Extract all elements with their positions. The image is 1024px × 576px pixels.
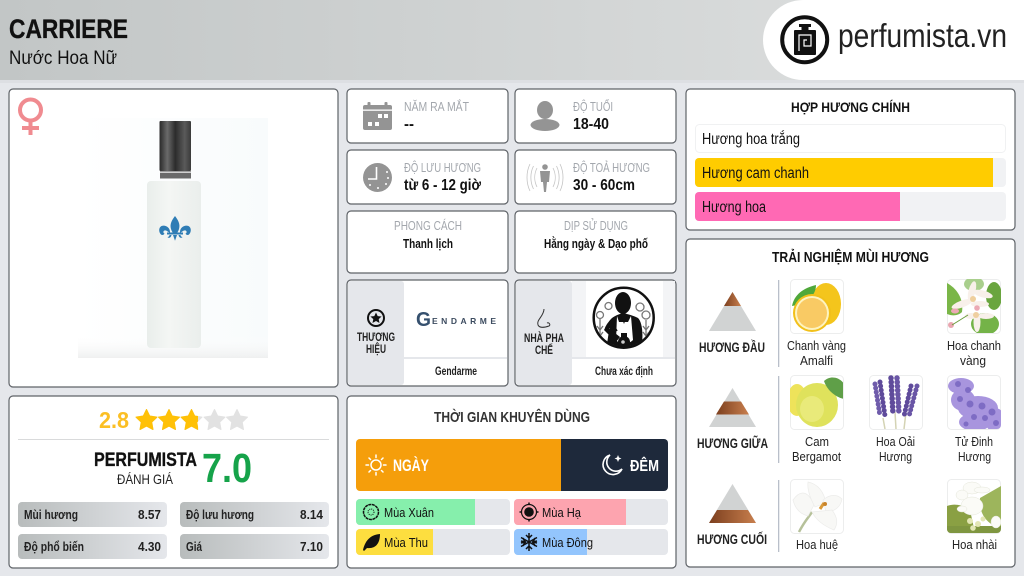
- card: occasion: DỊP SỬ DỤNG: [564, 218, 628, 233]
- note: lavender: [870, 376, 922, 430]
- card: release year: NĂM RA MẮT: [404, 99, 469, 114]
- card: occasion: Hằng ngày & Dạo phố: [544, 236, 648, 251]
- note label: amalfi lemon: Chanh vàng: [787, 338, 846, 353]
- card: release year: --: [404, 116, 414, 133]
- note label: bergamot: Cam: [805, 434, 829, 449]
- note label: bergamot: Bergamot: [792, 449, 841, 464]
- perfumista label: PERFUMISTA: [94, 450, 197, 471]
- note: amalfi lemon: [790, 280, 844, 334]
- community score: 2.8: [99, 407, 129, 433]
- card: brand: HIỆU: [366, 341, 386, 356]
- card: projection: ĐỘ TOẢ HƯƠNG: [573, 160, 650, 175]
- score: price: 7.10: [300, 539, 323, 554]
- brand logo: [416, 309, 496, 331]
- score: price: Giá: [186, 539, 203, 554]
- icon: sun: [366, 455, 386, 475]
- accord: floral: [695, 192, 1006, 221]
- pyramid: base notes: [709, 484, 756, 523]
- card: projection: 30 - 60cm: [573, 177, 635, 194]
- card: style: [347, 211, 508, 273]
- panel: scent experience: [686, 239, 1015, 567]
- perfume name: CARRIERE: [9, 14, 128, 44]
- accord: white floral: Hương hoa trắng: [702, 131, 800, 148]
- note label: lavender: Hoa Oải: [876, 434, 915, 449]
- icon: nose: [538, 309, 550, 327]
- score: popularity: Độ phổ biến: [24, 539, 84, 554]
- score: scent: Mùi hương: [24, 507, 78, 522]
- day night bar: ĐÊM: [630, 456, 659, 475]
- panel: main accords: HỢP HƯƠNG CHÍNH: [791, 99, 910, 115]
- panel: recommended time: [347, 396, 676, 568]
- season: autumn: [356, 529, 510, 555]
- icon: person: [530, 101, 560, 131]
- card: age: [515, 89, 676, 143]
- note label: lilac: Hương: [958, 449, 991, 464]
- star rating: [136, 410, 248, 430]
- note label: lavender: Hương: [879, 449, 912, 464]
- card: release year: [347, 89, 508, 143]
- note label: lily: Hoa huệ: [796, 537, 838, 552]
- pyramid: top notes: [709, 292, 756, 331]
- season: winter: [514, 529, 668, 555]
- icon: calendar: [363, 102, 392, 130]
- note label: lilac: Tử Đinh: [955, 434, 993, 449]
- panel: perfume image: [9, 89, 338, 387]
- card: perfumer: [515, 280, 676, 386]
- note label: lavender: [876, 434, 915, 464]
- card: brand: THƯƠNG: [357, 330, 395, 344]
- score: longevity: 8.14: [300, 507, 324, 522]
- card: brand: Gendarme: [435, 366, 477, 378]
- accord: floral: Hương hoa: [702, 199, 766, 216]
- score: popularity: [18, 534, 167, 559]
- accord: citrus: Hương cam chanh: [702, 165, 809, 182]
- review label: ĐÁNH GIÁ: [117, 471, 174, 487]
- season: spring: Mùa Xuân: [384, 505, 434, 520]
- card: longevity: từ 6 - 12 giờ: [404, 177, 482, 194]
- card: brand: [347, 280, 508, 386]
- score: longevity: [180, 502, 329, 527]
- panel: main accords: [686, 89, 1015, 230]
- note label: amalfi lemon: Amalfi: [800, 353, 833, 368]
- card: longevity: [347, 150, 508, 204]
- card: perfumer: NHÀ PHA: [524, 330, 564, 345]
- header band: [0, 0, 1024, 83]
- note label: bergamot: [792, 434, 841, 464]
- note: bergamot: [787, 376, 844, 430]
- card: style: Thanh lịch: [403, 237, 453, 251]
- note label: lemon blossom: vàng: [960, 353, 986, 368]
- season: summer: [514, 499, 668, 525]
- note: lilac: [948, 376, 1005, 432]
- card: perfumer: Chưa xác định: [595, 366, 653, 378]
- icon: female symbol: [20, 100, 41, 135]
- icon: star badge: [368, 310, 384, 326]
- panel: recommended time: THỜI GIAN KHUYÊN DÙNG: [434, 408, 590, 426]
- note: lemon blossom: [947, 277, 1002, 335]
- panel: scent experience: TRẢI NGHIỆM MÙI HƯƠNG: [772, 248, 929, 266]
- brand logo: G: [416, 309, 431, 331]
- brand logo: ENDARME: [432, 316, 496, 326]
- note label: jasmine: Hoa nhài: [952, 537, 997, 552]
- icon: clock: [363, 163, 392, 192]
- note: lily: [790, 480, 844, 534]
- accord: white floral: [696, 124, 1006, 152]
- score: scent: [18, 502, 167, 527]
- score: scent: 8.57: [138, 507, 161, 522]
- card: longevity: ĐỘ LƯU HƯƠNG: [404, 160, 481, 175]
- season: summer: Mùa Hạ: [542, 505, 582, 520]
- icon: scent radius: [527, 164, 563, 192]
- card: age: ĐỘ TUỔI: [573, 99, 613, 114]
- season: spring: [356, 499, 510, 525]
- card: projection: [515, 150, 676, 204]
- perfumer illustration: [594, 288, 654, 350]
- note label: lemon blossom: [947, 338, 1001, 368]
- score: popularity: 4.30: [138, 539, 161, 554]
- label: middle notes: HƯƠNG GIỮA: [697, 436, 768, 451]
- score: price: [180, 534, 329, 559]
- card: style: PHONG CÁCH: [394, 218, 462, 233]
- pyramid: middle notes: [709, 388, 756, 427]
- score: longevity: Độ lưu hương: [186, 507, 254, 522]
- logo: [763, 0, 1024, 80]
- day night bar: NGÀY: [393, 456, 429, 475]
- note label: lilac: [955, 434, 993, 464]
- icon: moon: [603, 455, 622, 475]
- panel: rating: [9, 396, 338, 568]
- note label: lemon blossom: Hoa chanh: [947, 338, 1001, 353]
- card: perfumer: CHẾ: [535, 342, 553, 357]
- card: occasion: [515, 211, 676, 273]
- perfume bottle photo: [78, 118, 268, 358]
- perfumista score: 7.0: [202, 445, 252, 491]
- note: jasmine: [947, 480, 1001, 534]
- accord: citrus: [695, 158, 1006, 187]
- label: base notes: HƯƠNG CUỐI: [697, 532, 767, 547]
- note label: amalfi lemon: [787, 338, 846, 368]
- perfume category: Nước Hoa Nữ: [9, 48, 117, 69]
- season: autumn: Mùa Thu: [384, 535, 428, 550]
- season: winter: Mùa Đông: [542, 535, 593, 550]
- day night bar: [356, 439, 668, 491]
- label: top notes: HƯƠNG ĐẦU: [699, 340, 765, 355]
- card: age: 18-40: [573, 116, 609, 133]
